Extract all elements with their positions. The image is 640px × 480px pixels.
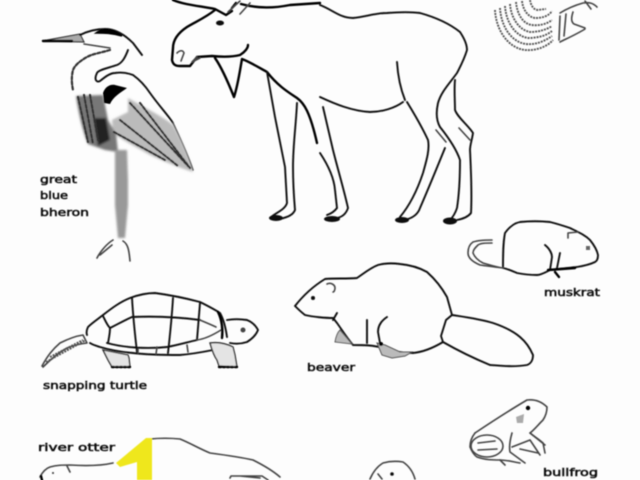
- label: great blue heron: [40, 173, 89, 219]
- label: great blue heron: bheron: [40, 206, 89, 219]
- label: great blue heron: blue: [40, 189, 68, 202]
- yellow number 1 overlay: [116, 438, 152, 480]
- heron body plumage: [76, 95, 193, 172]
- heron leg and foot: [115, 150, 128, 238]
- illustration: bullfrog: [470, 400, 547, 465]
- label: muskrat: muskrat: [544, 286, 601, 299]
- illustration: moose: [172, 0, 473, 224]
- illustration: beaver: [295, 263, 533, 366]
- illustration: small animal head at bottom edge: [370, 461, 415, 479]
- label: snapping turtle: snapping turtle: [43, 379, 147, 392]
- label: river otter: river otter: [38, 441, 116, 454]
- illustration: muskrat: [468, 221, 598, 277]
- illustration: great blue heron: [42, 29, 193, 261]
- illustration: striped creature top right: [495, 0, 597, 50]
- label: beaver: beaver: [307, 361, 356, 374]
- label: great blue heron: great: [40, 173, 78, 186]
- illustration: snapping turtle: [42, 293, 258, 367]
- label: bullfrog: bullfrog: [543, 466, 598, 479]
- illustration: river otter: [40, 438, 280, 480]
